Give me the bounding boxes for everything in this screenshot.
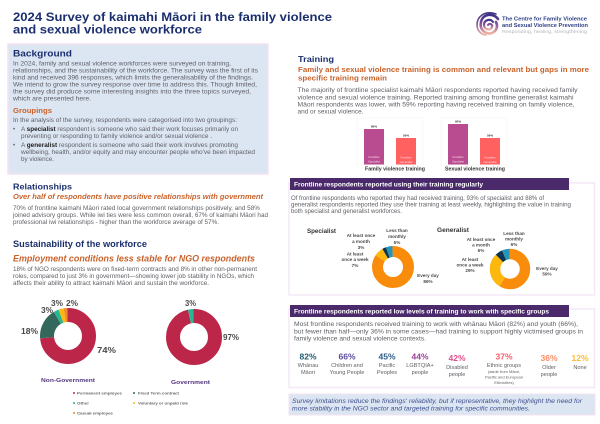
donut chart: generalist: 6%	[511, 242, 517, 247]
donut chart: specialist: a month	[352, 239, 370, 244]
stat: Whānau Māori: Māori	[301, 370, 315, 376]
text: relationships body: joined advisory groups. While iwi ties were less common overall, 67% of kaimahi Māori had	[12, 213, 268, 219]
donut chart: government: 3%	[185, 299, 196, 308]
stat: Disabled people	[446, 353, 468, 378]
text: training use body	[291, 196, 571, 215]
stat: Older people: 36%	[540, 353, 558, 363]
stat: Ethnic groups: Pacific and European	[485, 374, 523, 380]
legend: employment type: Other	[77, 401, 90, 405]
donut chart: generalist: 59%	[542, 272, 552, 276]
logo: The Centre for Family Violence and Sexual Violence Prevention: The Centre for Family Violence	[502, 16, 587, 22]
legend: employment type: Permanent employee	[77, 391, 122, 395]
heading: groupings: Groupings	[13, 106, 52, 115]
donut chart: generalist	[437, 228, 558, 284]
donut chart: specialist: monthly	[388, 234, 406, 239]
callout: survey limitations: Survey limitations reduce the findings' reliability, but if representative, they highlight the need for	[292, 398, 583, 405]
text: groupings body: preventing or responding to family violence and/or sexual violence .	[21, 134, 212, 140]
text: specific groups body: family violence and sexual violence contexts.	[294, 336, 426, 342]
text: groupings body: •	[13, 143, 15, 149]
banner: training use: Frontline respondents reported using their training regularly	[294, 182, 484, 188]
donut chart: specialist: once a week	[341, 257, 369, 262]
stat: Pacific Peoples: Pacific	[379, 363, 395, 369]
stat: Pacific Peoples: 45%	[378, 352, 396, 362]
text: groupings body: A specialist respondent is someone who said their work focuses primarily on	[21, 127, 238, 133]
panel: training use	[289, 178, 594, 295]
text: specific groups body: but fewer than half—only 36% in some cases—had training to support highly victimised groups in	[294, 328, 584, 336]
logo: The Centre for Family Violence and Sexual Violence Prevention	[477, 13, 588, 35]
donut chart: non-government: 2%	[66, 299, 78, 308]
subheading: sustainability: Employment conditions less stable for NGO respondents	[13, 254, 255, 264]
stat: Pacific Peoples	[377, 352, 397, 376]
donut chart: non-government: 3%	[41, 306, 53, 315]
bar chart: sexual violence training: Frontline	[453, 155, 464, 159]
text: training body: violence and sexual violence training. Reported training among frontline generalist kaimahi	[298, 96, 574, 102]
text: training use body: both specialist and generalist workforces.	[291, 209, 402, 215]
panel: background	[8, 44, 268, 174]
stat: Older people	[540, 353, 558, 378]
text: groupings body	[13, 118, 255, 163]
text: background body: We intend to grow the survey response over time to address this. Though limited,	[13, 82, 257, 88]
stat: Ethnic groups: Ethnic groups	[487, 363, 521, 369]
text: groupings body: In the analysis of the survey, respondents were categorised into two groupings:	[13, 118, 237, 124]
subheading: training: specific training remain	[298, 74, 387, 82]
text: sustainability body: roles, compared to just 3% in government—showing lower job stability in NGOs, which	[13, 274, 254, 280]
donut chart: generalist: Generalist	[437, 228, 469, 234]
text: background body: the survey did produce some interesting insights into the three topics surveyed,	[13, 90, 251, 96]
stat: LGBTQIA+ people: 44%	[411, 352, 429, 362]
bar chart: family violence training: 86%	[371, 124, 377, 128]
text: training body	[298, 88, 578, 116]
bar chart: sexual violence training: 59%	[487, 134, 493, 138]
stat: None: None	[573, 365, 587, 371]
bar chart: family violence training: 59%	[403, 134, 409, 138]
text: training body: The majority of frontline specialist kaimahi Māori respondents reported having received family	[298, 88, 578, 94]
donut chart: non-government	[21, 299, 116, 384]
bar chart: sexual violence training: 95%	[455, 120, 461, 124]
text: background body: In 2024, family and sexual violence workforces were surveyed on training,	[13, 62, 231, 68]
bar chart: sexual violence training: Frontline	[485, 156, 496, 160]
stat: Whānau Māori: 82%	[299, 352, 317, 362]
subheading: training: Family and sexual violence training is common and relevant but gaps in more	[298, 65, 589, 74]
stat: Children and Young People: 66%	[338, 352, 356, 362]
donut chart: government: Government	[171, 380, 210, 386]
bar chart: sexual violence training	[441, 118, 507, 173]
donut chart: specialist: 5%	[394, 240, 400, 245]
stat: Ethnic groups	[485, 352, 523, 385]
text: groupings body: •	[13, 127, 15, 133]
stat: Pacific Peoples: Peoples	[377, 370, 397, 376]
donut chart: generalist: a month	[472, 242, 490, 248]
donut chart: non-government: 74%	[97, 346, 116, 355]
text: background body: which are presented here.	[12, 96, 91, 102]
title	[13, 10, 332, 36]
heading: background: Background	[13, 48, 72, 60]
stat: Older people: Older	[542, 365, 556, 371]
stat: None	[571, 353, 589, 371]
callout: survey limitations: more stability in the NGO sector and targeted training for specific communities.	[292, 406, 530, 412]
text: training body: and or sexual violence.	[298, 110, 364, 116]
donut chart: non-government: 18%	[21, 327, 38, 336]
donut chart: specialist: 7%	[352, 263, 358, 268]
title: and sexual violence workforce	[13, 22, 202, 36]
bar chart: sexual violence training: Sexual violence training	[445, 167, 505, 173]
bar chart: sexual violence training: Specialist	[452, 160, 464, 164]
donut chart: specialist: Less than	[386, 228, 408, 233]
text: sustainability body	[13, 267, 257, 287]
stat: None: 12%	[571, 353, 589, 363]
text: specific groups body	[294, 321, 584, 342]
donut chart: specialist: 3%	[358, 245, 364, 250]
legend: employment type: Fixed Term contract	[138, 391, 180, 395]
text: training body: Māori respondents was lower, with 59% reporting having received training on family violence,	[298, 103, 575, 109]
text: relationships body	[12, 206, 268, 226]
bar chart: family violence training: Frontline	[401, 156, 412, 160]
bar chart: family violence training: Specialist	[368, 160, 380, 164]
subheading: training	[298, 65, 589, 82]
text: training use body: generalist respondents reported they use their training at least weekly, highlighting the value in training	[291, 203, 571, 209]
panel: specific groups	[289, 305, 594, 388]
text: groupings body: A generalist respondent is someone who said their work involves promoting	[21, 143, 238, 149]
bar chart: family violence training	[357, 118, 425, 173]
text: sustainability body: affects their ability to attract kaimahi Māori and sustain the workforce.	[13, 281, 209, 287]
section: training	[298, 54, 589, 116]
legend: employment type: Voluntary or unpaid role	[138, 401, 188, 405]
stat: Ethnic groups: Ethnicities)	[494, 380, 514, 385]
text: sustainability body: 18% of NGO respondents were on fixed-term contracts and 8% in other non-permanent	[13, 267, 257, 273]
text: relationships body: 70% of frontline kaimahi Māori rated local government relationships positively, and 58%	[13, 206, 261, 212]
donut chart: specialist	[307, 228, 439, 284]
stat: Whānau Māori	[298, 352, 318, 376]
text: groupings body: by violence.	[21, 157, 54, 163]
banner: specific groups: Frontline respondents reported low levels of training to work with specific groups	[294, 308, 550, 316]
donut chart: generalist: Every day	[536, 266, 558, 271]
donut chart: generalist: monthly	[505, 236, 523, 242]
stat: LGBTQIA+ people: people	[412, 370, 428, 376]
stat: Whānau Māori: Whānau	[298, 363, 318, 369]
bar chart: family violence training: Frontline	[369, 155, 380, 159]
heading: sustainability: Sustainability of the workforce	[13, 239, 147, 249]
donut chart: specialist: At least	[347, 252, 364, 256]
legend: employment type: Casual employee	[77, 411, 113, 415]
bar chart: family violence training: Family violence training	[365, 167, 425, 173]
stat: Disabled people: Disabled	[446, 365, 468, 371]
stat: Children and Young People: Young People	[330, 370, 364, 376]
stat: Ethnic groups: 37%	[495, 352, 513, 362]
text: relationships body: professional iwi relationships - higher than the workforce average of 57%.	[13, 220, 219, 226]
stat: Disabled people: people	[449, 372, 465, 378]
section: relationships	[12, 182, 268, 226]
donut chart: government: 97%	[223, 333, 239, 342]
logo: The Centre for Family Violence and Sexual Violence Prevention: Responding, healing, strengthening	[502, 29, 587, 35]
donut chart: generalist: 6%	[478, 248, 484, 253]
stat: Disabled people: 42%	[448, 353, 466, 363]
bar chart: family violence training: Generalist	[400, 160, 413, 164]
donut chart: specialist: Every day	[417, 273, 439, 278]
stat: Children and Young People: Children and	[331, 363, 363, 369]
stat: Children and Young People	[330, 352, 364, 376]
text: background body	[12, 62, 258, 102]
donut chart: non-government: 3%	[51, 299, 63, 308]
heading: relationships: Relationships	[13, 182, 72, 192]
stat: Older people: people	[541, 372, 557, 378]
title: 2024 Survey of kaimahi Māori in the family violence	[13, 10, 332, 24]
donut chart: government	[171, 299, 239, 386]
heading: training: Training	[298, 54, 334, 64]
banner: training use	[290, 178, 569, 190]
donut chart: generalist: Less than	[503, 231, 525, 236]
subheading: relationships: Over half of respondents have positive relationships with government	[13, 194, 264, 201]
bar chart: sexual violence training: Generalist	[484, 160, 497, 164]
stat: LGBTQIA+ people	[406, 352, 434, 376]
donut chart: generalist: At least once	[467, 237, 496, 242]
stat: LGBTQIA+ people: LGBTQIA+	[406, 363, 434, 369]
callout: survey limitations	[289, 394, 595, 415]
logo: The Centre for Family Violence and Sexual Violence Prevention: and Sexual Violence Prevention	[502, 23, 588, 29]
donut chart: specialist: At least once	[347, 233, 376, 238]
text: background body: kind and received 396 responses, which limits the generalisability of the findings.	[13, 76, 253, 82]
stat: Ethnic groups: (aside from Māori,	[488, 369, 520, 374]
legend: employment type	[73, 391, 188, 415]
text: specific groups body: Most frontline respondents received training to work with whānau Māori (82%) and youth (66%),	[294, 321, 578, 328]
donut chart: non-government: Non-Government	[41, 378, 95, 384]
donut chart: generalist: once a week	[456, 262, 484, 268]
banner: specific groups	[290, 305, 569, 317]
donut chart: generalist: 29%	[465, 268, 475, 273]
donut chart: generalist: At least	[462, 257, 479, 262]
text: background body: relationships, and the sustainability of the workforce. The survey was the first of its	[13, 68, 258, 74]
donut chart: specialist: Specialist	[307, 229, 336, 235]
donut chart: specialist: 86%	[423, 279, 433, 284]
section: sustainability of the workforce	[13, 239, 257, 287]
text: groupings body: wellbeing, health, and/or equity and may encounter people who've been impacted	[20, 150, 255, 156]
text: training use body: Of frontline respondents who reported they had received training, 93% of specialist and 88% of	[291, 196, 544, 202]
